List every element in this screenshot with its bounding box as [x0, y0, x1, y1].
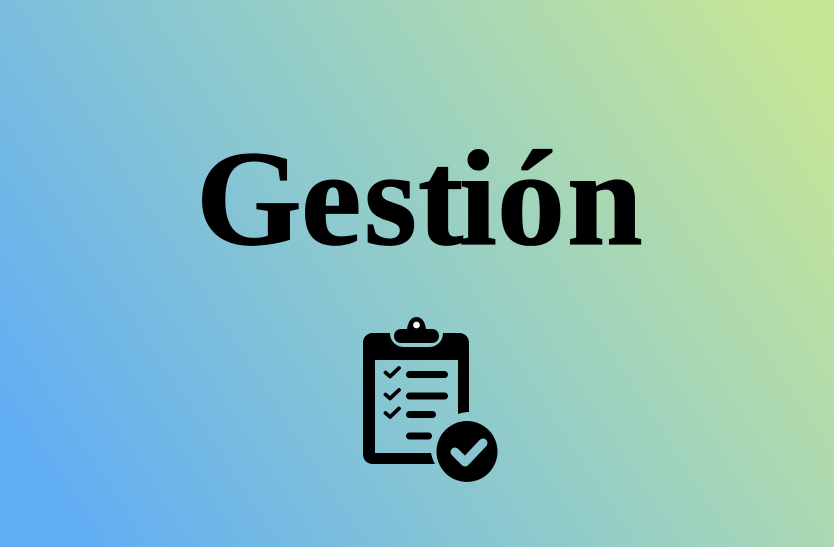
- checklist lines: [410, 374, 444, 436]
- clip hole: [413, 322, 420, 328]
- checklist ticks: [386, 368, 399, 417]
- icon: clipboard with checklist and check badge: [363, 317, 498, 482]
- clipboard clip: [394, 317, 439, 343]
- check badge: [436, 421, 498, 482]
- title: Gestión: [196, 124, 643, 274]
- clipboard board: [363, 333, 469, 464]
- badge check mark: [455, 443, 483, 462]
